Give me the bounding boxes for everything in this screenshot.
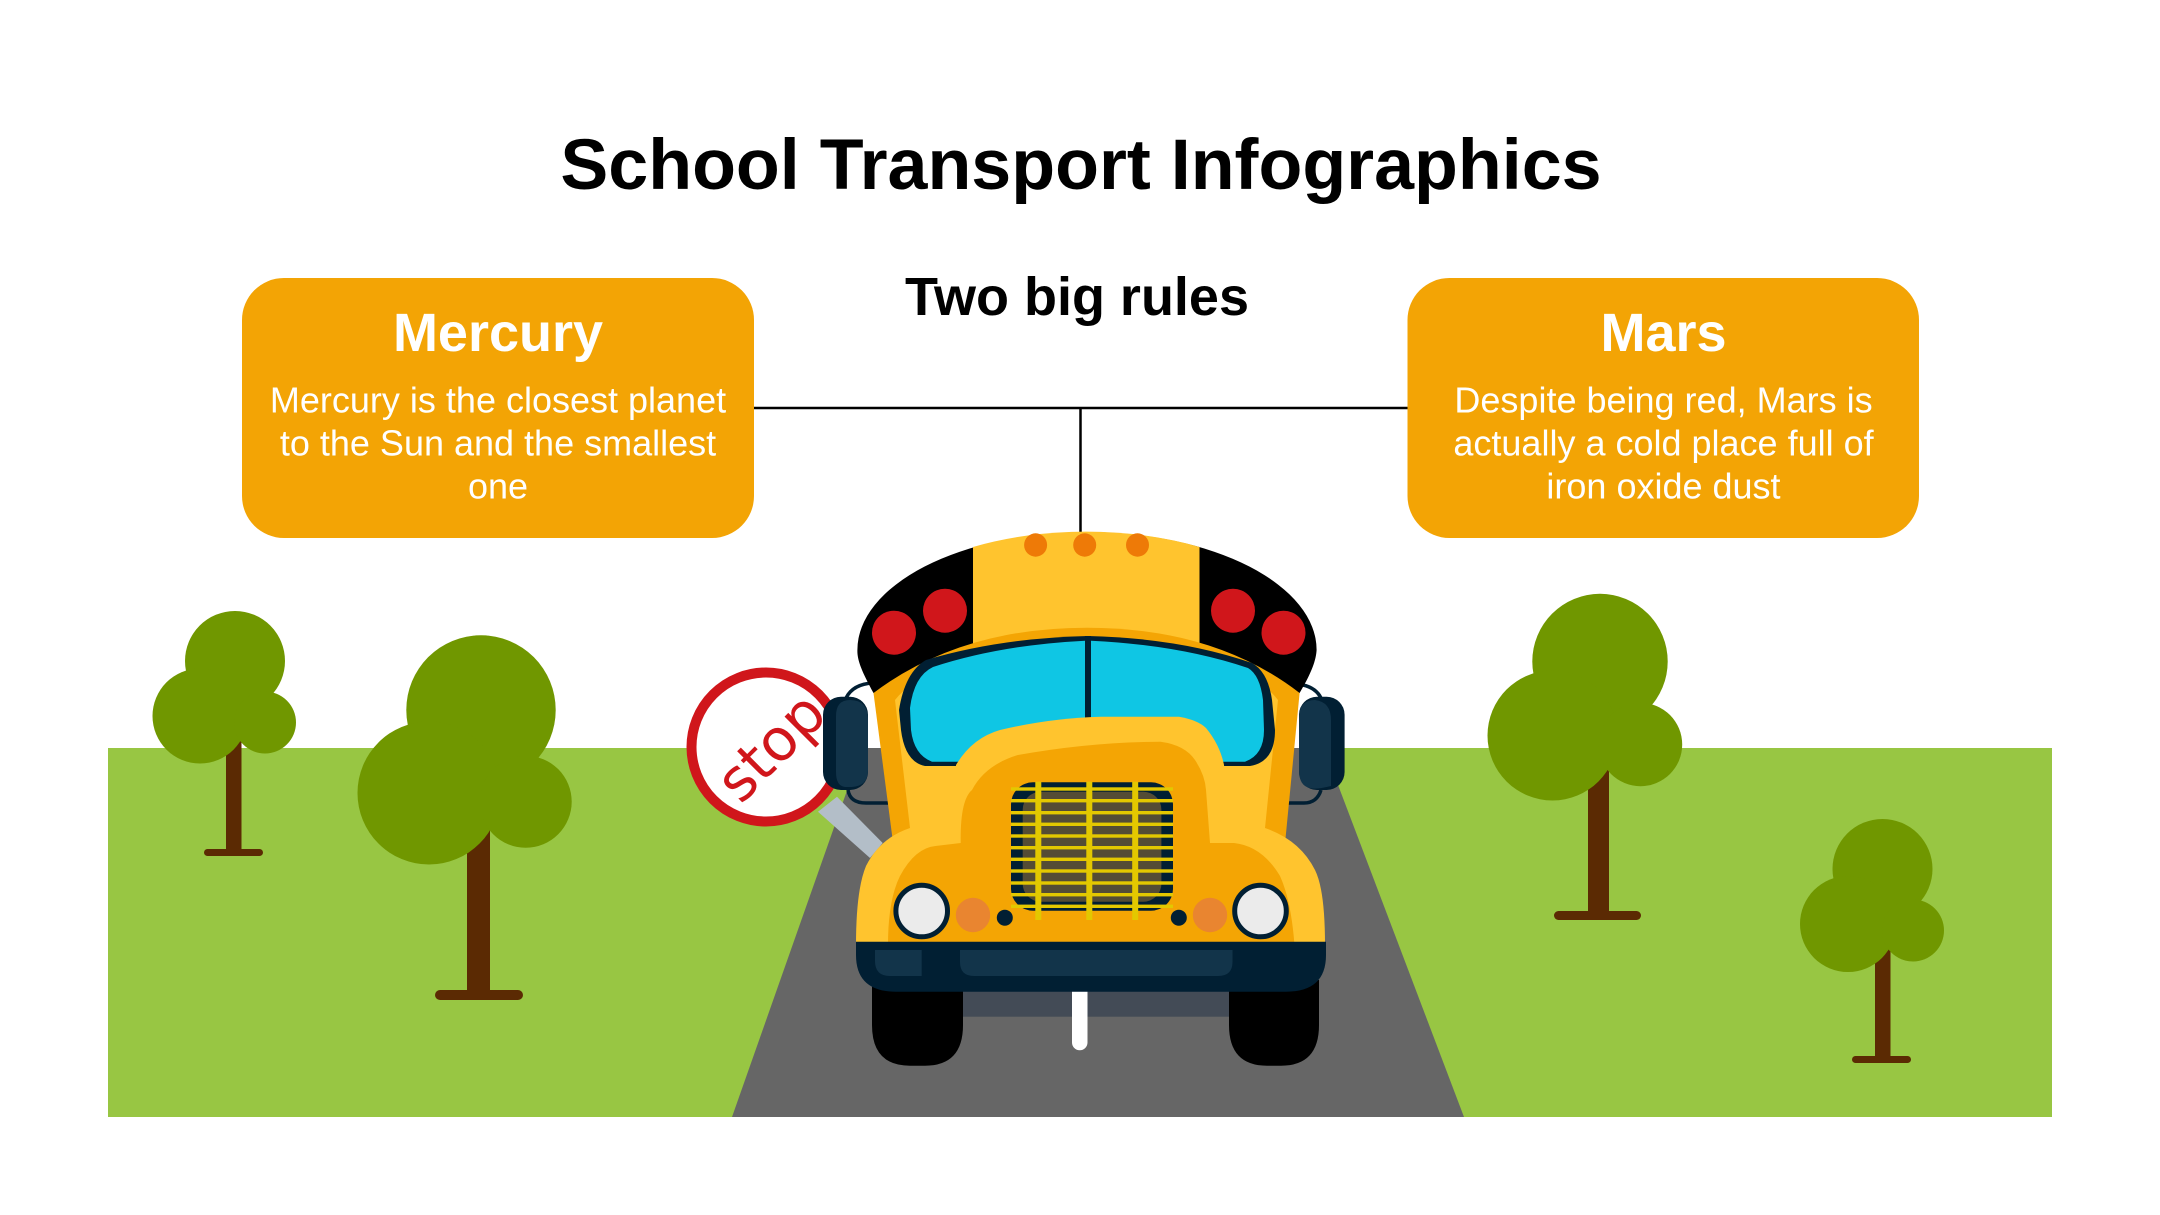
small dark lamps bbox=[997, 910, 1187, 926]
roof bbox=[857, 532, 1317, 693]
road bbox=[732, 748, 1464, 1117]
right mirror bbox=[1299, 697, 1345, 790]
icon: tree 2 bbox=[358, 635, 572, 1000]
red warning lights bbox=[872, 589, 1306, 655]
Mercury description: to the Sun and the smallest bbox=[280, 422, 716, 464]
icon: school bus bbox=[823, 532, 1345, 1066]
roof centre panel bbox=[973, 532, 1200, 650]
bus body bbox=[874, 628, 1300, 850]
indicator lights bbox=[956, 898, 1227, 932]
stop sign text: stop bbox=[703, 679, 839, 815]
Mercury description: one bbox=[468, 466, 528, 506]
panel: Mars bbox=[1408, 278, 1919, 538]
title: School Transport Infographics bbox=[560, 125, 1602, 205]
headlights bbox=[896, 885, 1286, 937]
Mars description: iron oxide dust bbox=[1546, 466, 1781, 506]
bumper bbox=[856, 942, 1326, 992]
Mercury heading: Mercury bbox=[393, 303, 603, 363]
subtitle: two big rules: Two big rules bbox=[905, 267, 1249, 327]
mirror arms bbox=[846, 683, 1321, 803]
grille bbox=[1011, 782, 1173, 920]
panel: Mercury bbox=[242, 278, 754, 538]
left mirror bbox=[823, 697, 868, 790]
Mars description: actually a cold place full of bbox=[1453, 422, 1875, 464]
road shadow bbox=[963, 985, 1229, 1017]
icon: tree 3 bbox=[1488, 594, 1682, 920]
icon: stop sign bbox=[692, 672, 883, 858]
connector lines bbox=[754, 408, 1408, 532]
Mars heading: Mars bbox=[1600, 303, 1727, 363]
wheels bbox=[872, 980, 1319, 1066]
hood bbox=[950, 717, 1228, 850]
roof marker lights bbox=[1024, 533, 1149, 557]
body light panel bbox=[856, 640, 1325, 945]
windshield bbox=[899, 636, 1275, 766]
fender and hood inner panel bbox=[888, 742, 1294, 945]
road centre marking bbox=[1072, 985, 1088, 1050]
icon: tree 1 bbox=[152, 611, 296, 856]
Mars description: Despite being red, Mars is bbox=[1454, 380, 1873, 420]
Mercury description: Mercury is the closest planet bbox=[270, 380, 726, 420]
ground: grass bbox=[108, 748, 2052, 1117]
icon: tree 4 bbox=[1800, 819, 1944, 1063]
